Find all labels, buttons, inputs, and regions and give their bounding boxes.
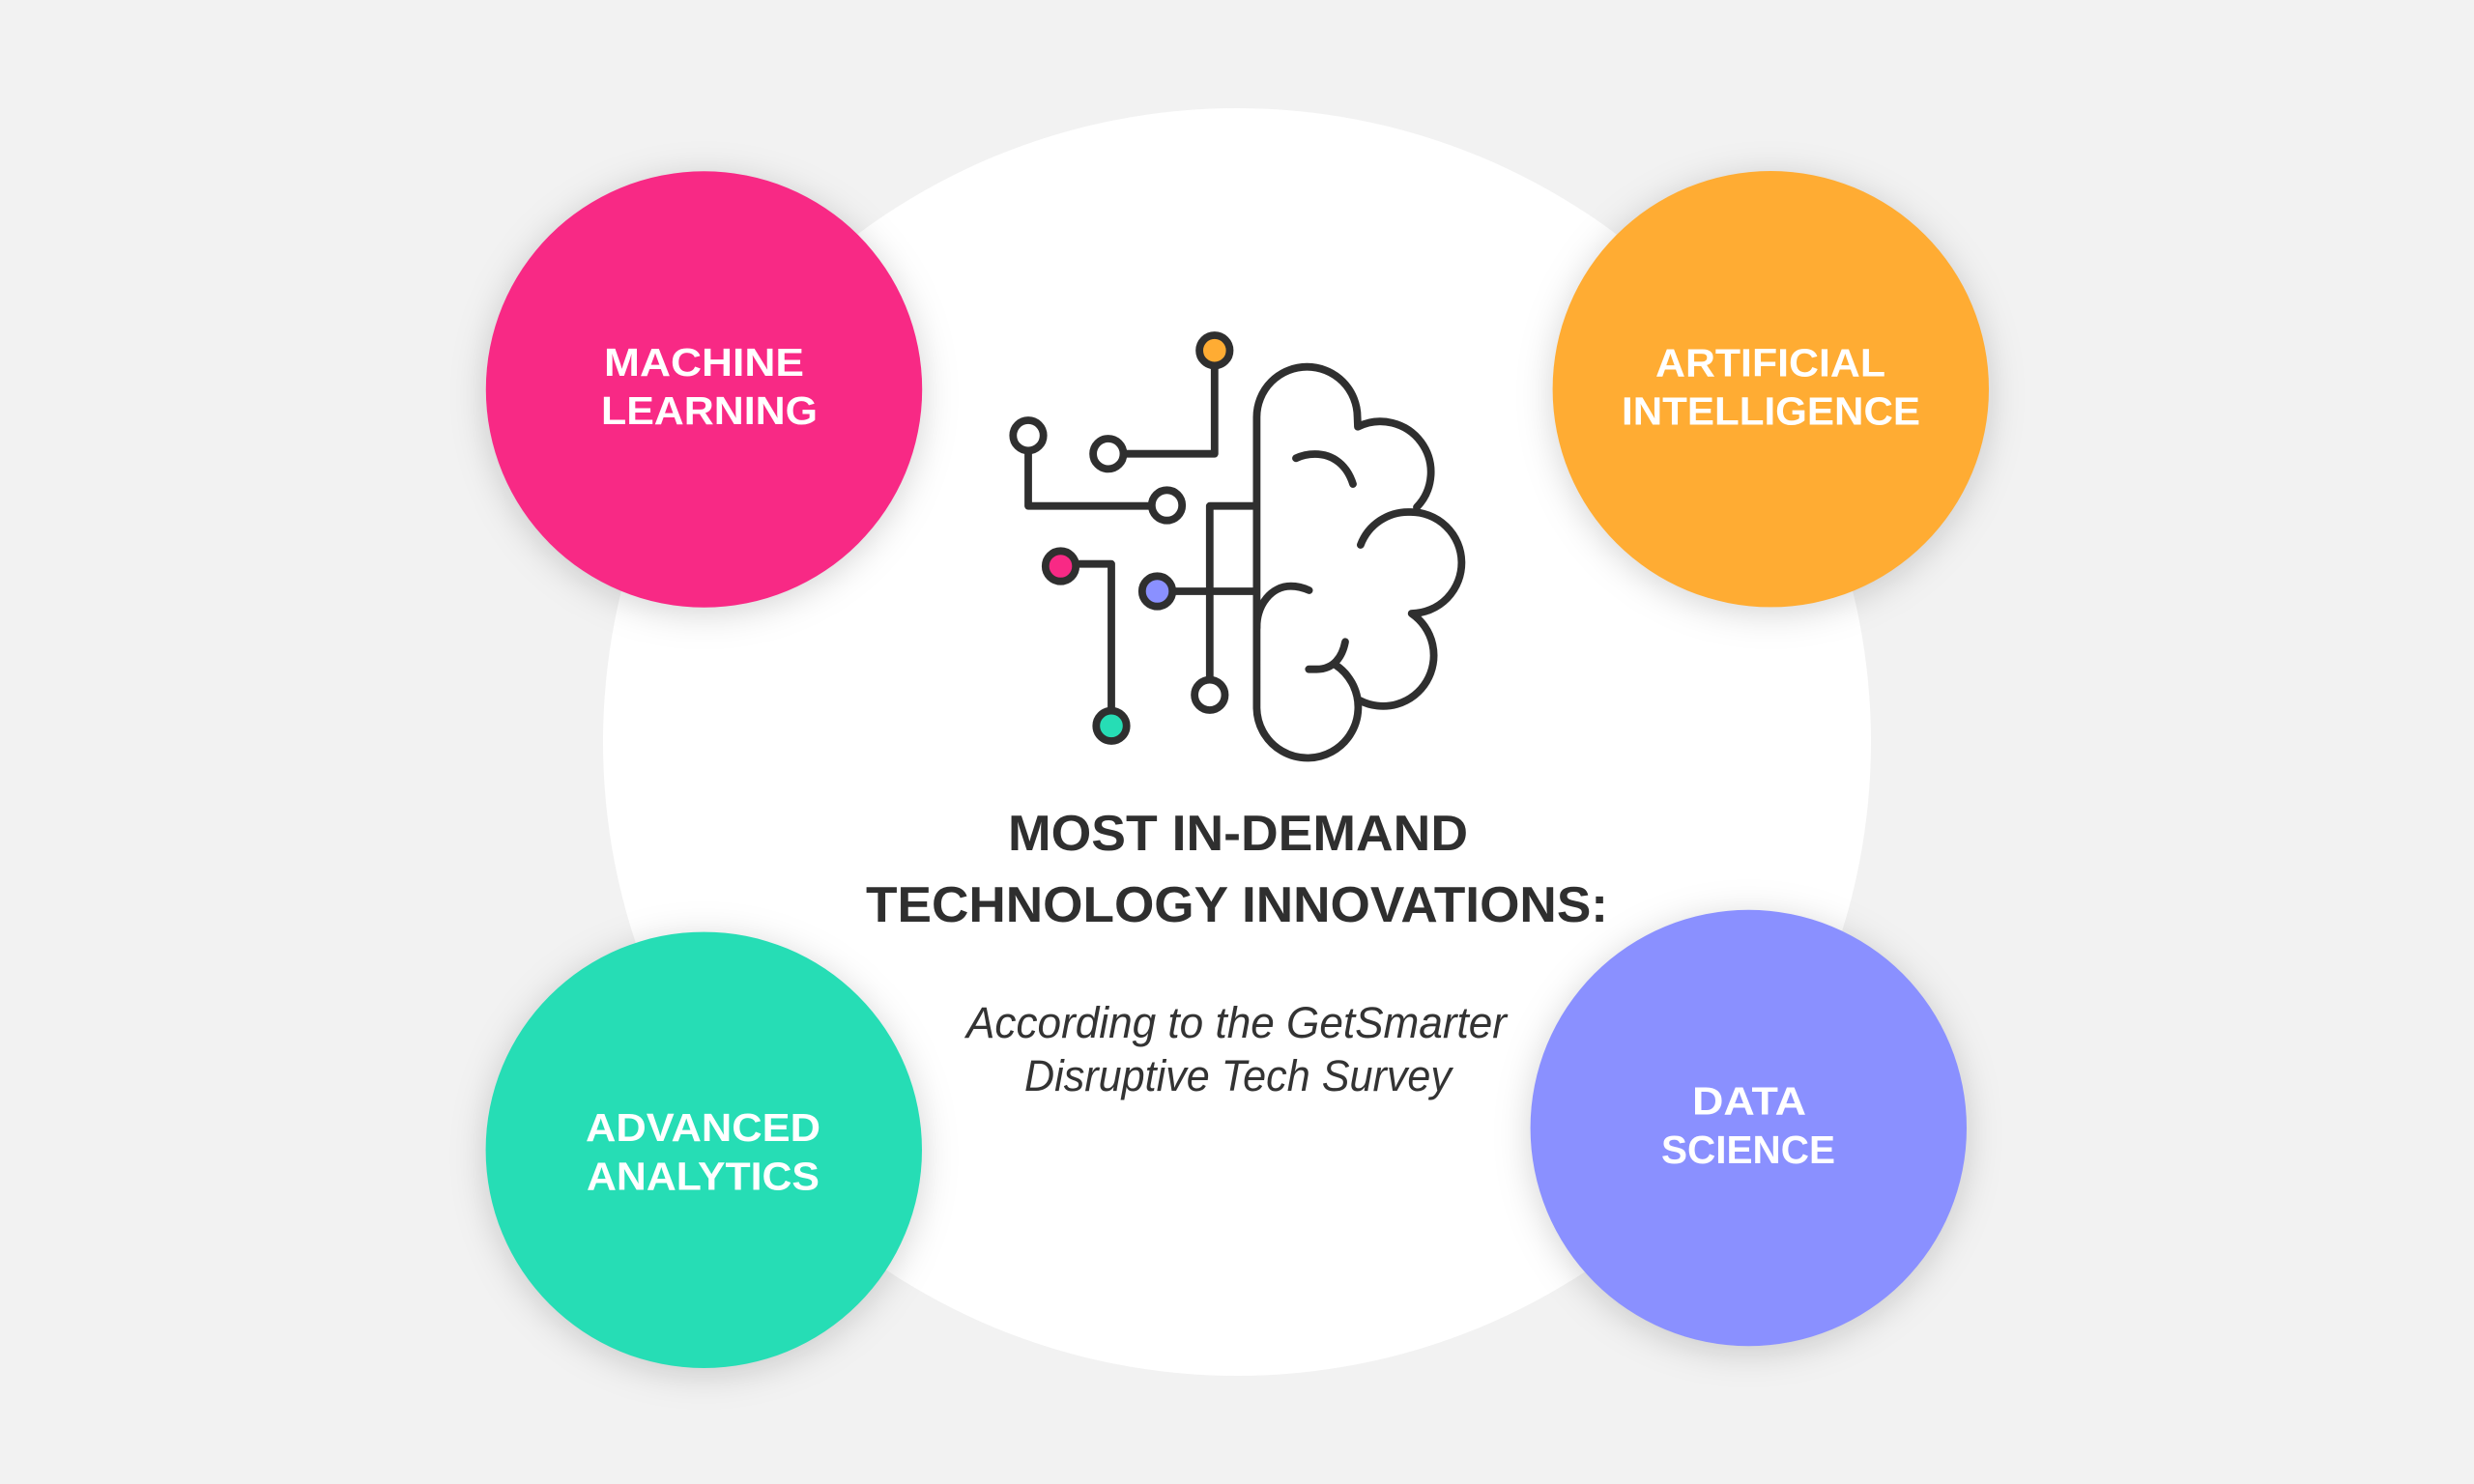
subtitle bbox=[964, 998, 1509, 1100]
circuit node: green bbox=[1096, 711, 1127, 741]
circuit node: white middle bbox=[1152, 490, 1182, 521]
circuit node: white bottom bbox=[1194, 680, 1225, 710]
circuit node: pink bbox=[1046, 551, 1076, 582]
circuit node: white left bbox=[1013, 420, 1044, 450]
panel: data science: DATA bbox=[1692, 1078, 1806, 1123]
central white circle bbox=[603, 108, 1871, 1376]
subtitle: According to the GetSmarter bbox=[964, 998, 1509, 1047]
panel: artificial intelligence: ARTIFICIAL bbox=[1655, 340, 1885, 385]
subtitle: Disruptive Tech Survey bbox=[1024, 1051, 1453, 1100]
circuit lines bbox=[1028, 369, 1256, 707]
circuit node: purple bbox=[1142, 576, 1172, 607]
panel: machine learning: LEARNING bbox=[601, 388, 818, 433]
panel: advanced analytics bbox=[486, 932, 922, 1368]
panel: data science: SCIENCE bbox=[1661, 1127, 1835, 1172]
panel: machine learning: MACHINE bbox=[604, 340, 804, 385]
panel: artificial intelligence: INTELLIGENCE bbox=[1622, 389, 1920, 434]
panel: machine learning bbox=[486, 171, 922, 608]
title bbox=[866, 806, 1608, 933]
icon: brain with circuit bbox=[1013, 335, 1461, 757]
panel: data science bbox=[1531, 910, 1967, 1346]
circuit node: white top bbox=[1093, 439, 1124, 469]
panel: advanced analytics: ANALYTICS bbox=[587, 1154, 820, 1198]
title: MOST IN-DEMAND bbox=[1008, 806, 1468, 862]
circuit node: orange bbox=[1199, 335, 1230, 365]
panel: artificial intelligence bbox=[1553, 171, 1989, 607]
brain outline bbox=[1256, 367, 1461, 757]
title: TECHNOLOGY INNOVATIONS: bbox=[866, 877, 1608, 933]
panel: advanced analytics: ADVANCED bbox=[586, 1105, 820, 1150]
